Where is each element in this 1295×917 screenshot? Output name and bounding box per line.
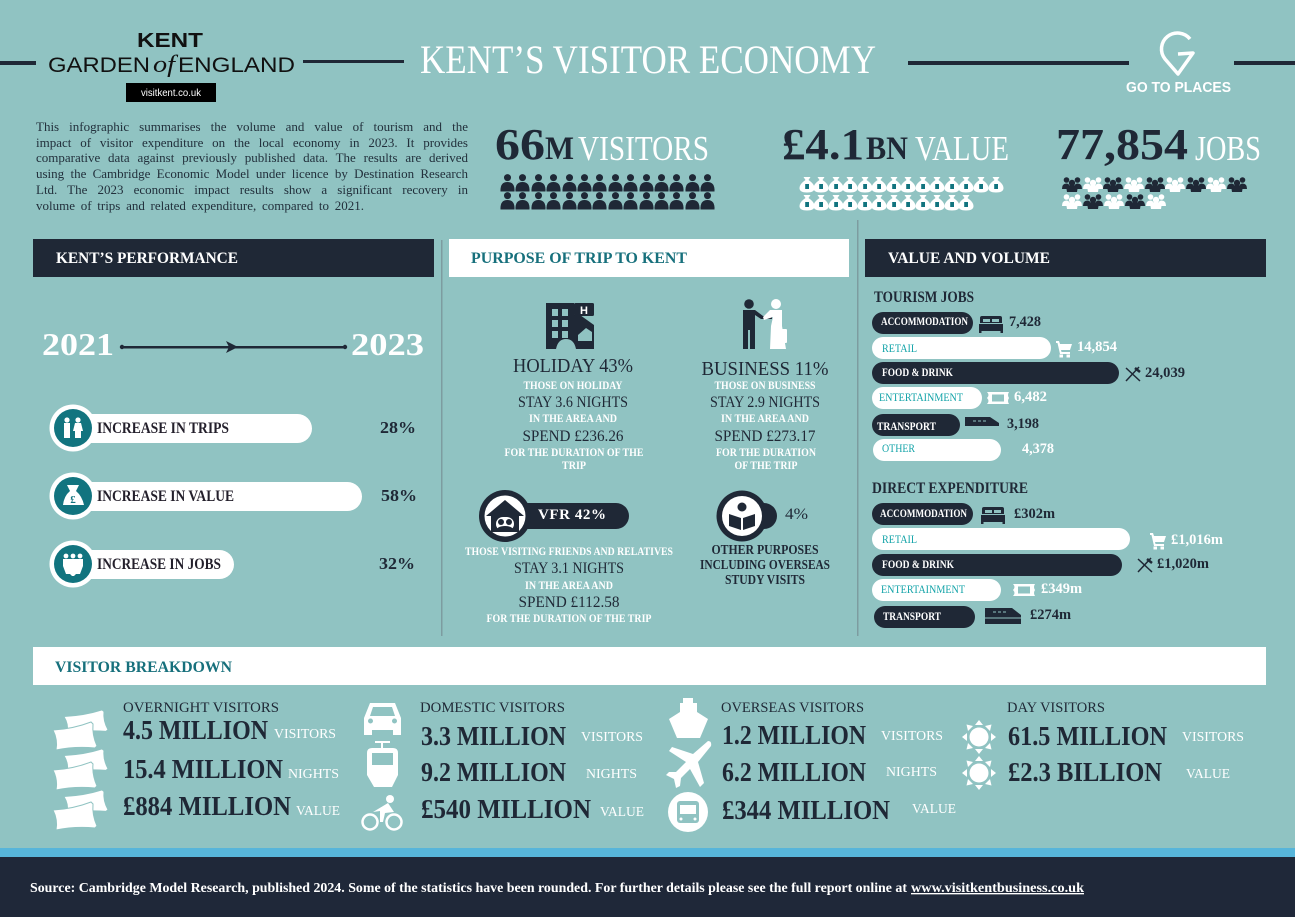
logo: Kent Garden of England: GARDEN (48, 54, 150, 77)
icon row: money bags (800, 177, 1004, 210)
bar: increase in trips: 28% (380, 418, 416, 437)
chart: tourism jobs: 14,854 (1077, 339, 1117, 355)
icon: hotel: H (580, 305, 588, 317)
text: holiday: FOR THE DURATION OF THE (504, 447, 644, 459)
bar: increase in trips: INCREASE IN TRIPS (97, 420, 229, 437)
logo: Kent Garden of England: visitkent.co.uk (141, 88, 202, 99)
panel: value and volume (865, 239, 1266, 628)
heading (33, 647, 1266, 685)
chart: direct expenditure: £1,016m (1171, 532, 1223, 548)
stat: £4.1BN value: BN (866, 131, 908, 167)
icon row: jobs (1062, 177, 1247, 209)
chart: tourism jobs: ENTERTAINMENT (879, 390, 964, 404)
overseas visitors: 6.2 MILLION (722, 757, 866, 787)
chart: direct expenditure: TRANSPORT (883, 609, 941, 623)
chart: direct expenditure: ENTERTAINMENT (881, 582, 966, 596)
text: holiday: TRIP (562, 460, 586, 472)
day visitors: DAY VISITORS (1007, 700, 1105, 716)
overseas visitors: £344 MILLION (722, 795, 890, 825)
year timeline arrow: 2023 (351, 326, 424, 362)
domestic visitors: VISITORS (581, 730, 643, 745)
VFR badge (479, 490, 629, 542)
intro text: Ltd. The 2023 economic impact results show a significant recovery in (36, 182, 468, 197)
text: visiting friends and relatives (465, 546, 673, 625)
text: visiting friends and relatives: FOR THE DURATION OF THE TRIP (486, 613, 652, 625)
text: holiday: IN THE AREA AND (529, 413, 617, 425)
heading (33, 239, 434, 277)
column dividers (441, 220, 858, 636)
overseas visitors: VISITORS (881, 729, 943, 744)
stat: £4.1BN value: £4.1 (782, 120, 864, 169)
bar: increase in value (50, 472, 417, 520)
overnight visitors: VISITORS (274, 727, 336, 742)
footer: www.visitkentbusiness.co.uk (911, 880, 1085, 895)
bar: increase in jobs (50, 540, 415, 588)
chart: tourism jobs: 7,428 (1009, 314, 1041, 330)
stat: 77,854 jobs: 77,854 (1056, 120, 1188, 169)
logo: Go To Places (1126, 33, 1231, 96)
chart: tourism jobs: OTHER (882, 441, 915, 455)
day visitors: 61.5 MILLION (1008, 721, 1167, 751)
chart: tourism jobs: 4,378 (1022, 441, 1054, 457)
heading (449, 239, 849, 277)
overnight visitors: OVERNIGHT VISITORS (123, 700, 279, 716)
text: business: STAY 2.9 NIGHTS (710, 394, 820, 411)
text: business: THOSE ON BUSINESS (714, 380, 816, 392)
chart: direct expenditure: £1,020m (1157, 556, 1209, 572)
domestic visitors: VALUE (600, 805, 644, 820)
domestic visitors: NIGHTS (586, 767, 637, 782)
domestic visitors: 9.2 MILLION (421, 757, 566, 787)
stat: £4.1BN value (782, 120, 1009, 169)
domestic visitors: £540 MILLION (421, 794, 591, 824)
bar: increase in jobs: 32% (379, 554, 415, 573)
intro text: impact of visitor expenditure on the local economy in 2023. It provides (36, 135, 468, 150)
chart: direct expenditure: £302m (1014, 506, 1055, 522)
panel: purpose of trip (449, 239, 849, 625)
chart: direct expenditure: FOOD & DRINK (882, 557, 955, 571)
text: holiday: THOSE ON HOLIDAY (524, 380, 623, 392)
panel: Kent's performance (33, 239, 434, 588)
chart: direct expenditure: ACCOMMODATION (880, 506, 967, 520)
text: holiday: SPEND £236.26 (522, 428, 624, 445)
overnight visitors: VALUE (296, 804, 340, 819)
stat: 66M visitors (495, 120, 709, 169)
icon: business handshake (743, 299, 787, 349)
day visitors: VALUE (1186, 767, 1230, 782)
bar: increase in value: 58% (381, 486, 417, 505)
text: visiting friends and relatives: THOSE VISITING FRIENDS AND RELATIVES (465, 546, 673, 558)
chart: tourism jobs: TRANSPORT (877, 419, 936, 433)
intro text (36, 119, 468, 213)
chart: direct expenditure: £349m (1041, 581, 1082, 597)
overseas visitors: 1.2 MILLION (722, 720, 866, 750)
overseas visitors: NIGHTS (886, 765, 937, 780)
chart: tourism jobs: RETAIL (882, 341, 917, 355)
chart: tourism jobs: TOURISM JOBS (874, 289, 974, 306)
intro text: comparative data against previously published data. The results are derived (36, 150, 468, 165)
chart: direct expenditure: £274m (1030, 607, 1071, 623)
footer (0, 848, 1295, 917)
overseas visitors: OVERSEAS VISITORS (721, 700, 864, 716)
text: business (702, 358, 828, 472)
text: holiday: HOLIDAY 43% (513, 355, 633, 377)
stat: 66M visitors: 66 (495, 120, 545, 169)
footer: Source: Cambridge Model Research, published 2024. Some of the statistics have been rounded. For further details please see the full report online at (30, 880, 908, 895)
logo: Kent Garden of England: KENT (137, 30, 203, 52)
logo: Go To Places: GO TO PLACES (1126, 80, 1231, 96)
overnight visitors: 4.5 MILLION (123, 715, 268, 745)
header rules (0, 60, 1295, 65)
icon row: visitors (500, 174, 715, 210)
year timeline arrow: 2021 (42, 326, 114, 362)
text: business: SPEND £273.17 (714, 428, 816, 445)
VFR badge: VFR 42% (538, 507, 606, 523)
overseas visitors: VALUE (912, 802, 956, 817)
text: visiting friends and relatives: IN THE AREA AND (525, 580, 613, 592)
heading: PURPOSE OF TRIP TO KENT (471, 250, 687, 267)
chart: tourism jobs (872, 289, 1185, 461)
intro text: using the Cambridge Economic Model under licence by Destination Research (36, 166, 468, 181)
bar: increase in value: INCREASE IN VALUE (97, 488, 234, 505)
logo: Kent Garden of England: ENGLAND (178, 54, 295, 77)
chart: tourism jobs: 6,482 (1014, 389, 1047, 405)
overnight visitors: £884 MILLION (123, 791, 291, 821)
domestic visitors (420, 700, 644, 824)
bar: increase in value: £ (70, 494, 76, 506)
stat: £4.1BN value: VALUE (915, 129, 1009, 168)
heading: KENT’S PERFORMANCE (56, 250, 238, 267)
chart: direct expenditure: DIRECT EXPENDITURE (872, 480, 1028, 497)
bar: increase in trips (50, 404, 416, 452)
intro text: volume of trips and related expenditure, compared to 2021. (36, 198, 364, 213)
logo: Kent Garden of England (48, 30, 295, 102)
text: visiting friends and relatives: STAY 3.1 NIGHTS (514, 560, 624, 577)
chart: direct expenditure: RETAIL (882, 532, 917, 546)
heading (865, 239, 1266, 277)
intro text: This infographic summarises the volume and value of tourism and the (36, 119, 468, 134)
heading: VISITOR BREAKDOWN (55, 659, 232, 676)
overnight visitors: NIGHTS (288, 767, 339, 782)
domestic visitors: DOMESTIC VISITORS (420, 700, 565, 716)
other purposes badge: 4% (785, 506, 808, 523)
day visitors: £2.3 BILLION (1008, 757, 1162, 787)
text: other purposes: STUDY VISITS (725, 572, 805, 587)
other purposes badge (716, 490, 808, 542)
overnight visitors: 15.4 MILLION (123, 754, 283, 784)
overseas visitors (721, 700, 956, 825)
text: other purposes: OTHER PURPOSES (712, 542, 818, 557)
text: business: BUSINESS 11% (702, 358, 828, 380)
chart: tourism jobs: 24,039 (1145, 365, 1185, 381)
panel: visitor breakdown (33, 647, 1266, 832)
icons: pillows (53, 710, 108, 830)
text: holiday: STAY 3.6 NIGHTS (518, 394, 628, 411)
title: KENT’S VISITOR ECONOMY (420, 37, 876, 82)
logo: Kent Garden of England: of (153, 52, 179, 78)
stat: 66M visitors: M (545, 131, 574, 167)
domestic visitors: 3.3 MILLION (421, 721, 566, 751)
chart: tourism jobs: 3,198 (1007, 416, 1039, 432)
day visitors: VISITORS (1182, 730, 1244, 745)
text: business: FOR THE DURATION (716, 447, 817, 459)
chart: tourism jobs: FOOD & DRINK (882, 365, 954, 379)
text: other purposes: INCLUDING OVERSEAS (700, 557, 830, 572)
text: other purposes (700, 542, 830, 587)
bar: increase in jobs: INCREASE IN JOBS (97, 556, 221, 573)
chart: tourism jobs: ACCOMMODATION (881, 314, 968, 328)
year timeline arrow (42, 326, 424, 362)
text: visiting friends and relatives: SPEND £112.58 (518, 594, 620, 611)
overnight visitors (123, 700, 340, 821)
stat: 66M visitors: VISITORS (578, 129, 709, 168)
day visitors (1007, 700, 1244, 787)
text: holiday (504, 355, 644, 472)
icon: hotel (546, 303, 594, 349)
icons: suns (962, 720, 996, 790)
text: business: OF THE TRIP (734, 460, 798, 472)
heading: VALUE AND VOLUME (888, 250, 1050, 267)
icons: car, train, cyclist (362, 703, 402, 830)
stat: 77,854 jobs: JOBS (1195, 129, 1261, 168)
icons: ship, plane, train (666, 698, 711, 832)
stat: 77,854 jobs (1056, 120, 1261, 169)
chart: direct expenditure (872, 480, 1223, 628)
text: business: IN THE AREA AND (721, 413, 809, 425)
